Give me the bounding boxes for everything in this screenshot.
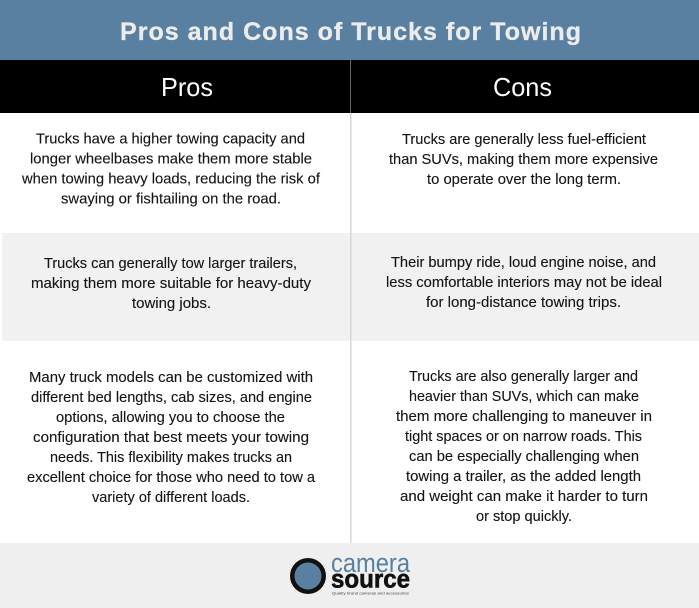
title: Pros and Cons of Trucks for Towing — [120, 18, 581, 46]
cons row 3 text: tight spaces or on narrow roads. This — [405, 428, 642, 445]
pros row 2 text: towing jobs. — [132, 295, 211, 312]
pros row 2 text: making them more suitable for heavy-duty — [31, 275, 311, 292]
pros row 3 text: excellent choice for those who need to tow a — [27, 469, 316, 486]
logo wordmark: source — [331, 564, 410, 594]
cons row 2 text: Their bumpy ride, loud engine noise, and — [391, 254, 656, 271]
table body backgrounds — [0, 113, 699, 543]
cons row 1 text — [389, 131, 658, 188]
cons row 3 text: and weight can make it harder to turn — [400, 488, 648, 505]
cons row 3 text — [396, 368, 652, 525]
cons row 2 text: for long-distance towing trips. — [426, 294, 621, 311]
heading: pros: Pros — [161, 72, 213, 102]
logo wordmark — [331, 548, 411, 596]
footer with logo — [0, 543, 699, 608]
table header — [0, 60, 699, 113]
pros row 3 text: needs. This flexibility makes trucks an — [50, 449, 292, 466]
pros row 3 text: different bed lengths, cab sizes, and engine — [31, 389, 312, 406]
pros row 1 text — [21, 130, 321, 208]
cons row 3 text: can be especially challenging when — [409, 448, 639, 465]
cons row 2 text: less comfortable interiors may not be ideal — [386, 274, 662, 291]
pros row 1 text: when towing heavy loads, reducing the risk of — [21, 170, 321, 188]
logo wordmark: camera — [331, 548, 411, 578]
title banner — [0, 0, 699, 60]
icon: camera lens logo — [290, 558, 326, 594]
pros row 2 text — [31, 255, 311, 312]
cons row 3 text: Trucks are also generally larger and — [409, 368, 638, 385]
heading: cons: Cons — [493, 72, 552, 102]
cons row 3 text: heavier than SUVs, which can make — [409, 388, 639, 405]
pros row 3 text — [27, 369, 316, 506]
cons row 3 text: or stop quickly. — [476, 508, 572, 525]
pros row 3 text: configuration that best meets your towing — [33, 429, 309, 446]
pros row 1 text: swaying or fishtailing on the road. — [61, 190, 281, 208]
cons row 2 text — [386, 254, 662, 311]
cons row 1 text: Trucks are generally less fuel-efficient — [402, 131, 647, 148]
cons row 1 text: to operate over the long term. — [427, 171, 621, 188]
pros row 3 text: variety of different loads. — [92, 489, 250, 506]
pros row 1 text: Trucks have a higher towing capacity and — [36, 130, 305, 148]
pros row 3 text: options, allowing you to choose the — [56, 409, 285, 426]
cons row 1 text: than SUVs, making them more expensive — [389, 151, 658, 168]
cons row 3 text: towing a trailer, as the added length — [406, 468, 641, 485]
pros row 2 text: Trucks can generally tow larger trailers, — [44, 255, 297, 272]
pros row 1 text: longer wheelbases make them more stable — [30, 150, 312, 168]
pros row 3 text: Many truck models can be customized with — [29, 369, 313, 386]
cons row 3 text: them more challenging to maneuver in — [396, 408, 652, 425]
logo wordmark: Quality brand cameras and accessories — [332, 590, 409, 596]
